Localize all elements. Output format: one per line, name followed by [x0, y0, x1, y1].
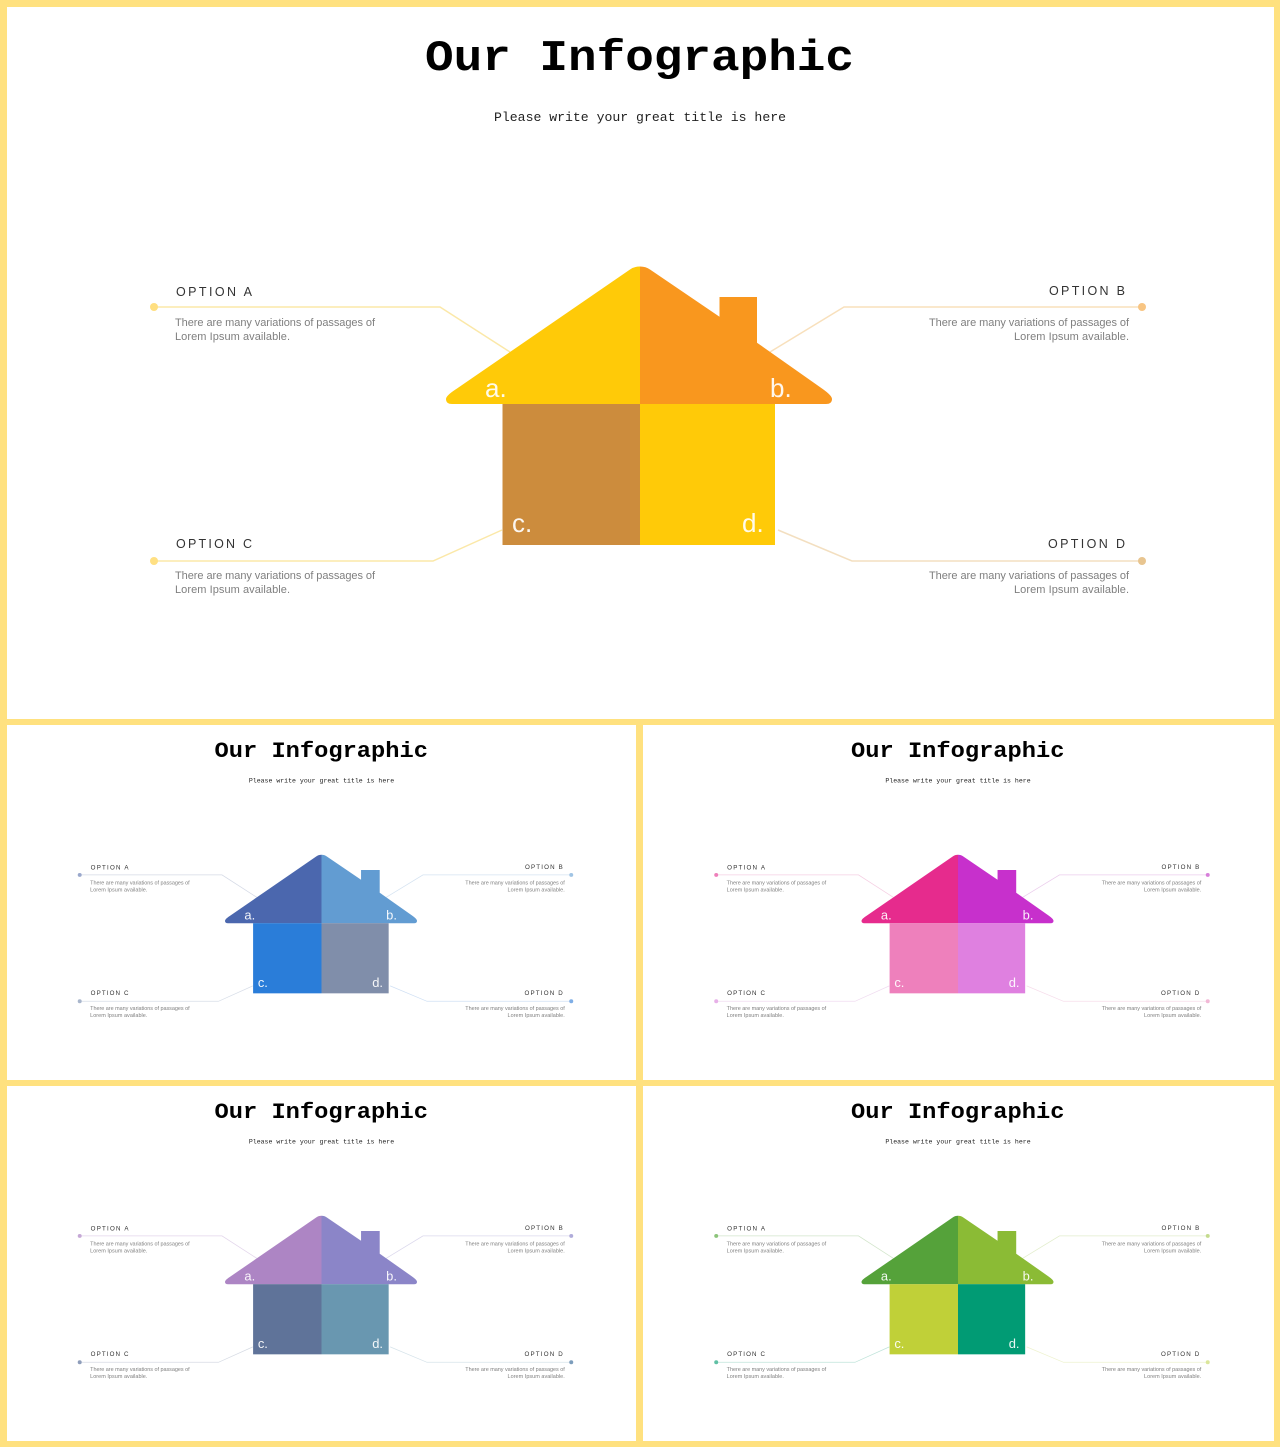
option B callout: OPTION B	[1161, 864, 1199, 871]
panel: blue house	[7, 725, 636, 1080]
option A callout: Lorem Ipsum available.	[727, 1248, 784, 1254]
option C callout: OPTION C	[727, 1351, 765, 1358]
option B callout: Lorem Ipsum available.	[1144, 887, 1202, 893]
option B callout	[1023, 864, 1210, 897]
option C callout: OPTION C	[727, 990, 765, 997]
option C callout: OPTION C	[176, 537, 252, 551]
title: Our Infographic	[851, 1100, 1064, 1125]
house icon: d.	[742, 508, 764, 538]
option D callout: OPTION D	[524, 990, 563, 997]
option D callout	[778, 530, 1146, 596]
option D callout: There are many variations of passages of	[465, 1006, 565, 1012]
option B callout: Lorem Ipsum available.	[1144, 1248, 1202, 1254]
subtitle: Please write your great title is here	[249, 1138, 394, 1145]
panel: purple house	[7, 1086, 636, 1441]
subtitle: Please write your great title is here	[249, 777, 394, 784]
option B callout: Lorem Ipsum available.	[508, 1248, 565, 1254]
option B callout: There are many variations of passages of	[465, 880, 565, 886]
option C callout	[150, 530, 502, 596]
option C callout	[714, 986, 889, 1019]
house icon: a.	[244, 1269, 255, 1284]
option A callout: OPTION A	[91, 864, 129, 871]
house icon: d.	[372, 1336, 383, 1351]
option B callout: There are many variations of passages of	[1102, 880, 1202, 886]
house icon	[861, 855, 1054, 993]
subtitle: Please write your great title is here	[885, 777, 1031, 784]
option D callout	[390, 986, 573, 1019]
option A callout: Lorem Ipsum available.	[90, 887, 148, 893]
house icon	[861, 1216, 1054, 1354]
option C callout: There are many variations of passages of	[90, 1367, 190, 1373]
option A callout	[78, 1225, 257, 1258]
house icon: b.	[386, 1269, 397, 1284]
option D callout: There are many variations of passages of	[929, 570, 1130, 582]
option A callout: OPTION A	[91, 1225, 129, 1232]
option C callout: Lorem Ipsum available.	[175, 584, 290, 596]
option A callout	[150, 285, 510, 352]
house icon: a.	[881, 1269, 892, 1284]
option A callout	[78, 864, 257, 897]
house icon: c.	[258, 975, 268, 990]
option A callout: OPTION A	[727, 864, 766, 871]
option A callout: There are many variations of passages of	[727, 1241, 827, 1247]
option D callout: Lorem Ipsum available.	[1144, 1374, 1202, 1380]
panel: pink house	[643, 725, 1274, 1080]
option D callout: OPTION D	[1161, 1351, 1200, 1358]
house icon: c.	[894, 1336, 904, 1351]
option B callout: OPTION B	[525, 1225, 563, 1232]
option D callout: Lorem Ipsum available.	[508, 1374, 565, 1380]
option B callout: There are many variations of passages of	[465, 1241, 565, 1247]
option D callout: Lorem Ipsum available.	[1014, 584, 1129, 596]
option B callout: Lorem Ipsum available.	[508, 887, 565, 893]
title: Our Infographic	[425, 34, 854, 84]
option B callout: Lorem Ipsum available.	[1014, 331, 1129, 343]
house icon	[446, 266, 832, 545]
house icon: d.	[1009, 975, 1020, 990]
option A callout: Lorem Ipsum available.	[90, 1248, 148, 1254]
house icon: b.	[1023, 1269, 1033, 1284]
option A callout	[714, 864, 893, 897]
option C callout: There are many variations of passages of	[727, 1367, 827, 1373]
option C callout: Lorem Ipsum available.	[90, 1013, 148, 1019]
option D callout: OPTION D	[1161, 990, 1200, 997]
option D callout	[1027, 1347, 1210, 1380]
panel: green house	[643, 1086, 1274, 1441]
house icon: b.	[770, 373, 792, 403]
house icon: c.	[894, 975, 904, 990]
option D callout	[390, 1347, 573, 1380]
option D callout: There are many variations of passages of	[465, 1367, 565, 1373]
title: Our Infographic	[215, 739, 428, 764]
option C callout: There are many variations of passages of	[727, 1006, 827, 1012]
house icon: d.	[372, 975, 383, 990]
title: Our Infographic	[215, 1100, 428, 1125]
house icon: c.	[258, 1336, 268, 1351]
option C callout: Lorem Ipsum available.	[727, 1374, 784, 1380]
house icon: a.	[881, 908, 892, 923]
subtitle: Please write your great title is here	[494, 111, 786, 125]
title: Our Infographic	[851, 739, 1064, 764]
house icon	[225, 855, 417, 993]
option A callout: Lorem Ipsum available.	[727, 887, 784, 893]
option B callout: OPTION B	[1049, 284, 1125, 298]
option C callout: There are many variations of passages of	[90, 1006, 190, 1012]
house icon: b.	[386, 908, 397, 923]
option D callout: There are many variations of passages of	[1102, 1367, 1202, 1373]
option B callout	[386, 1225, 573, 1258]
house icon	[225, 1216, 417, 1354]
option B callout: OPTION B	[525, 864, 563, 871]
option C callout	[714, 1347, 889, 1380]
option A callout	[714, 1225, 893, 1258]
house icon: b.	[1023, 908, 1033, 923]
option C callout: OPTION C	[91, 990, 129, 997]
option C callout	[78, 1347, 253, 1380]
house icon: a.	[244, 908, 255, 923]
option D callout: There are many variations of passages of	[1102, 1006, 1202, 1012]
option A callout: There are many variations of passages of	[90, 1241, 190, 1247]
option B callout: OPTION B	[1161, 1225, 1199, 1232]
option A callout: OPTION A	[727, 1225, 766, 1232]
option C callout: OPTION C	[91, 1351, 129, 1358]
option C callout: Lorem Ipsum available.	[90, 1374, 148, 1380]
option D callout: OPTION D	[524, 1351, 563, 1358]
option B callout	[1023, 1225, 1210, 1258]
house icon: d.	[1009, 1336, 1020, 1351]
option B callout: There are many variations of passages of	[929, 317, 1130, 329]
option D callout	[1027, 986, 1210, 1019]
option A callout: Lorem Ipsum available.	[175, 331, 290, 343]
option B callout	[386, 864, 573, 897]
option C callout: Lorem Ipsum available.	[727, 1013, 784, 1019]
subtitle: Please write your great title is here	[885, 1138, 1031, 1145]
house icon: c.	[512, 508, 532, 538]
option B callout: There are many variations of passages of	[1102, 1241, 1202, 1247]
option C callout: There are many variations of passages of	[175, 570, 376, 582]
option D callout: Lorem Ipsum available.	[508, 1013, 565, 1019]
panel: large yellow house	[7, 7, 1274, 719]
option A callout: There are many variations of passages of	[175, 317, 376, 329]
option C callout	[78, 986, 253, 1019]
option A callout: There are many variations of passages of	[727, 880, 827, 886]
option A callout: There are many variations of passages of	[90, 880, 190, 886]
option D callout: Lorem Ipsum available.	[1144, 1013, 1202, 1019]
option D callout: OPTION D	[1048, 537, 1125, 551]
option B callout	[770, 284, 1146, 352]
house icon: a.	[485, 373, 507, 403]
option A callout: OPTION A	[176, 285, 253, 299]
